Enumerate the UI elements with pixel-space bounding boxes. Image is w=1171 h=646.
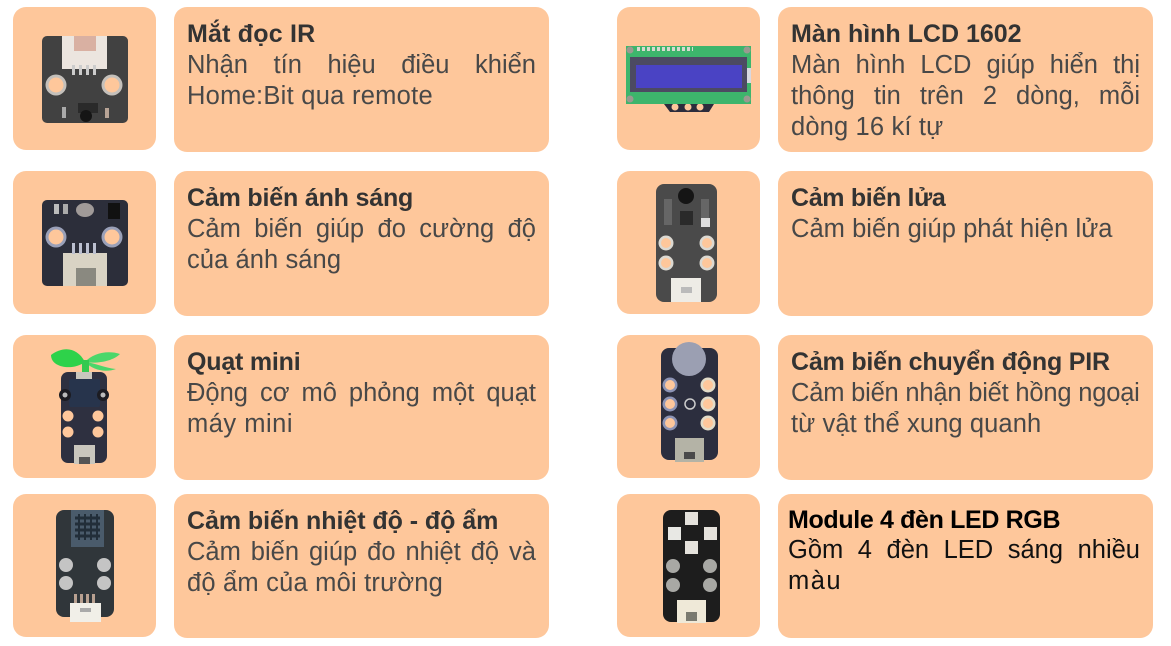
text block: độ ẩm của môi trường — [187, 569, 443, 597]
icon: temperature humidity module — [56, 510, 114, 622]
icon: IR receiver module — [42, 36, 128, 123]
heading: Quạt mini — [187, 348, 300, 376]
panel: temperature humidity text — [174, 494, 549, 638]
text block: Cảm biến nhận biết hồng ngoại — [791, 379, 1140, 407]
panel: IR receiver image — [13, 7, 156, 150]
text block: thông tin trên 2 dòng, mỗi — [791, 82, 1140, 110]
panel: light sensor text — [174, 171, 549, 316]
heading: Cảm biến ánh sáng — [187, 184, 413, 212]
heading: Cảm biến chuyển động PIR — [791, 348, 1110, 376]
heading: Module 4 đèn LED RGB — [788, 506, 1060, 534]
panel: temperature humidity image — [13, 494, 156, 637]
icon: mini fan module — [51, 349, 120, 464]
panel: flame sensor text — [778, 171, 1153, 316]
panel: RGB LED module text — [778, 494, 1153, 638]
panel: PIR sensor image — [617, 335, 760, 478]
icon: LCD 1602 module — [626, 46, 751, 112]
panel: LCD text — [778, 7, 1153, 152]
icon: PIR sensor module — [661, 342, 718, 462]
icon: light sensor module — [42, 200, 128, 286]
panel: mini fan image — [13, 335, 156, 478]
panel: PIR sensor text — [778, 335, 1153, 480]
heading: Cảm biến nhiệt độ - độ ẩm — [187, 507, 498, 535]
text block: máy mini — [187, 410, 293, 438]
heading: Cảm biến lửa — [791, 184, 945, 212]
text block: Màn hình LCD giúp hiển thị — [791, 51, 1140, 79]
panel: LCD image — [617, 7, 760, 150]
icon: flame sensor module — [656, 184, 717, 302]
panel: RGB LED module image — [617, 494, 760, 637]
text block: Gồm 4 đèn LED sáng nhiều — [788, 536, 1140, 564]
panel: flame sensor image — [617, 171, 760, 314]
panel: light sensor image — [13, 171, 156, 314]
text block: màu — [788, 567, 842, 595]
text block: dòng 16 kí tự — [791, 113, 943, 141]
panel: IR receiver text — [174, 7, 549, 152]
text block: Cảm biến giúp đo nhiệt độ và — [187, 538, 536, 566]
text block: Home:Bit qua remote — [187, 82, 433, 110]
text block: Cảm biến giúp đo cường độ — [187, 215, 536, 243]
panel: mini fan text — [174, 335, 549, 480]
heading: Mắt đọc IR — [187, 20, 315, 48]
heading: Màn hình LCD 1602 — [791, 20, 1022, 48]
text block: của ánh sáng — [187, 246, 341, 274]
text block: Cảm biến giúp phát hiện lửa — [791, 215, 1113, 243]
text block: Động cơ mô phỏng một quạt — [187, 379, 536, 407]
text block: Nhận tín hiệu điều khiển — [187, 51, 536, 79]
icon: RGB LED module — [663, 510, 720, 623]
text block: từ vật thể xung quanh — [791, 410, 1041, 438]
